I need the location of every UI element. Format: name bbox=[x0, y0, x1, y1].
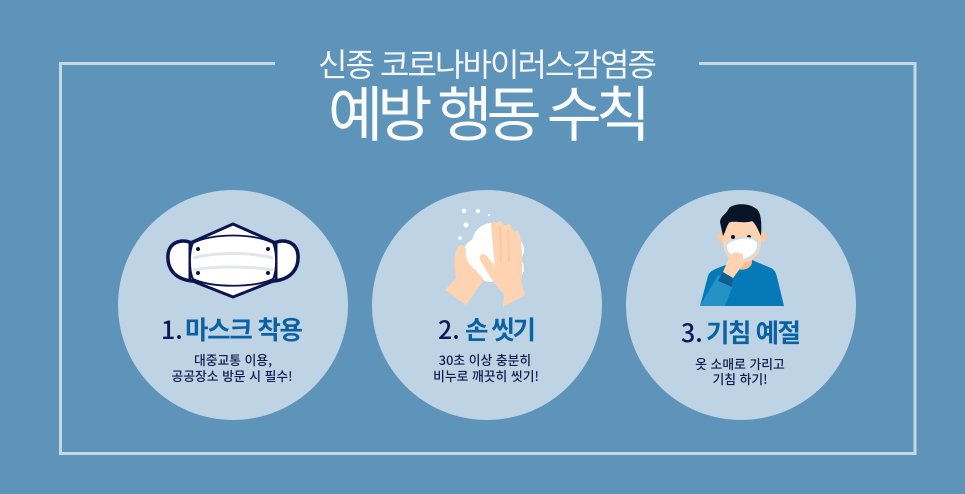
panel: wash hands bbox=[372, 190, 602, 420]
text: cough etiquette: 기침 하기! bbox=[712, 369, 768, 388]
icon: washing hands bbox=[445, 209, 525, 307]
title: 신종 코로나바이러스감염증 bbox=[318, 40, 657, 86]
title: 예방 행동 수칙 bbox=[328, 67, 651, 154]
text: wear a mask: 대중교통 이용, bbox=[194, 350, 272, 369]
panel: wear a mask bbox=[118, 190, 348, 420]
heading: cough etiquette: 기침 예절 bbox=[706, 313, 801, 350]
text: wash hands bbox=[433, 350, 539, 385]
icon: face mask bbox=[168, 224, 298, 297]
heading: wear a mask: 1. bbox=[161, 311, 183, 347]
text: cough etiquette: 옷 소매로 가리고 bbox=[695, 354, 785, 373]
heading: wash hands: 2. bbox=[438, 311, 460, 347]
text: wear a mask: 공공장소 방문 시 필수! bbox=[171, 366, 293, 385]
heading: wash hands: 손 씻기 bbox=[465, 310, 536, 347]
panel: cough etiquette bbox=[626, 190, 856, 420]
text: wear a mask bbox=[171, 350, 293, 385]
text: wash hands: 비누로 깨끗히 씻기! bbox=[433, 366, 539, 385]
heading: cough etiquette: 3. bbox=[681, 314, 703, 350]
text: wash hands: 30초 이상 충분히 bbox=[439, 350, 531, 369]
text: cough etiquette bbox=[695, 354, 785, 388]
icon: coughing man bbox=[700, 204, 784, 306]
heading: wear a mask: 마스크 착용 bbox=[185, 310, 303, 347]
